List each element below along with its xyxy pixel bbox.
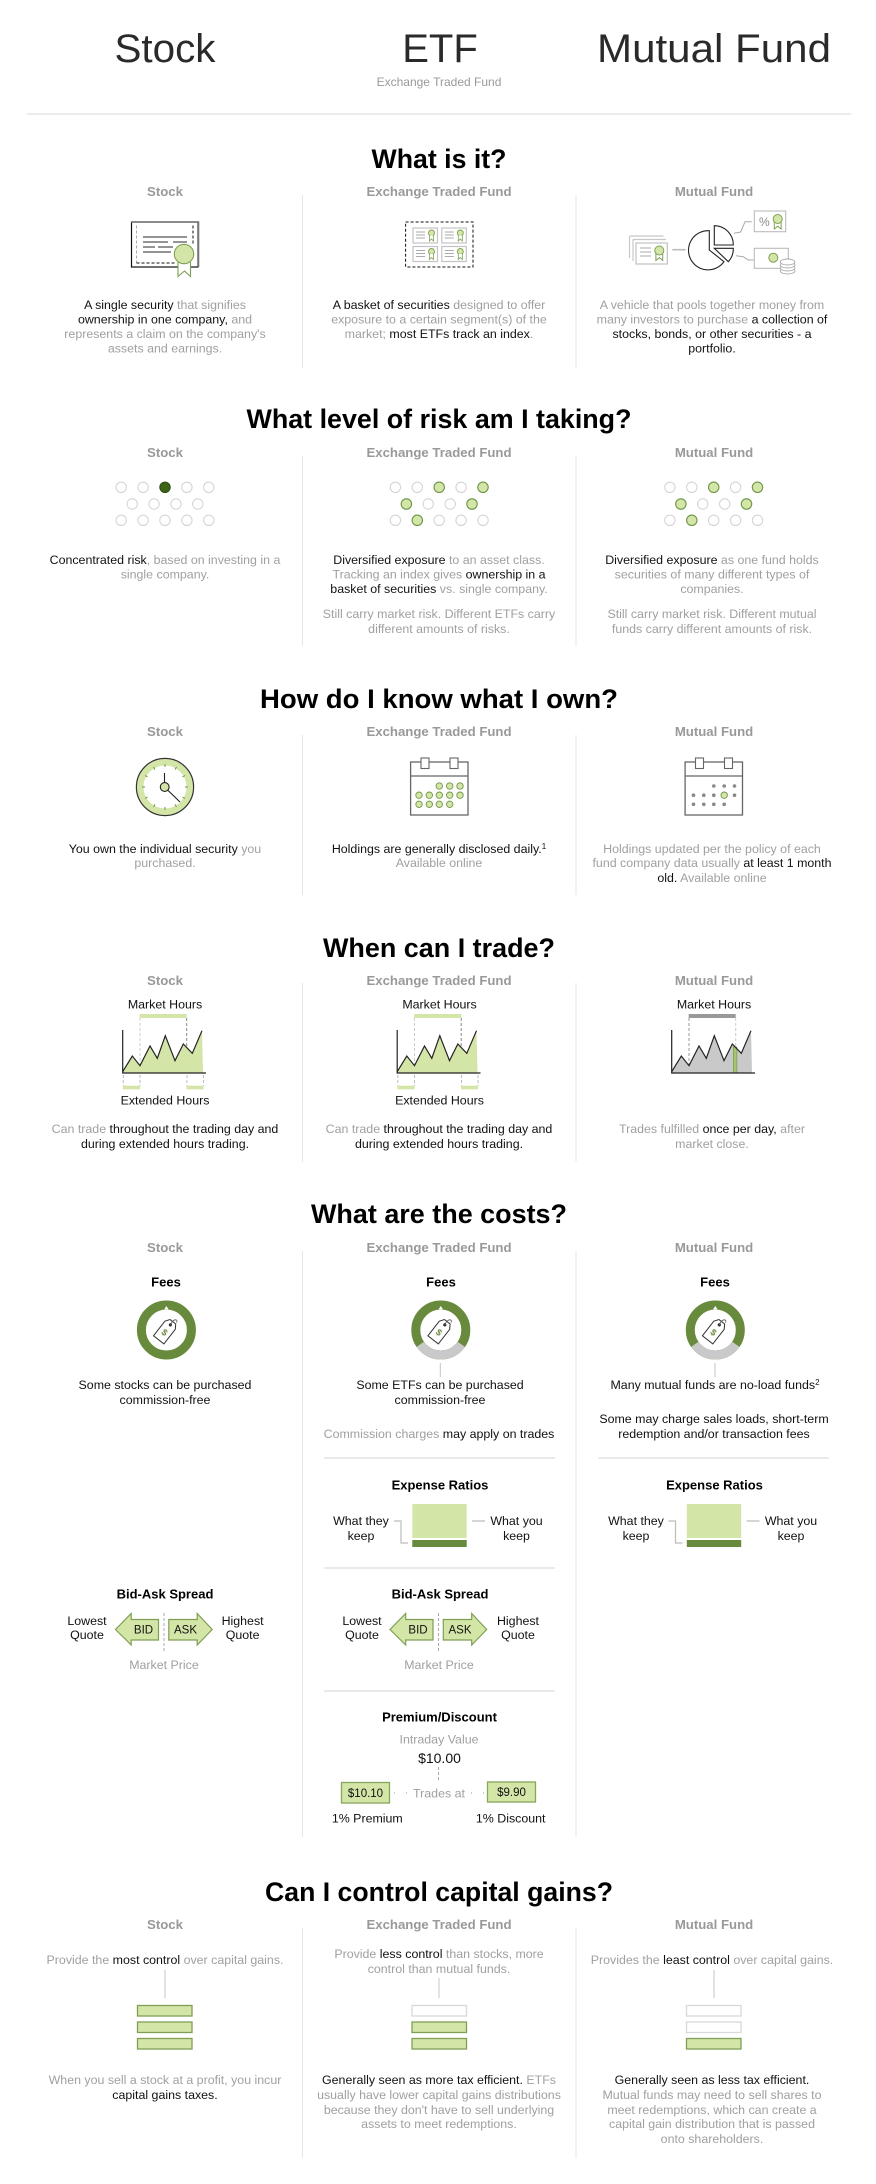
panel: mutual fund: Mutual Fund: [675, 184, 753, 199]
icon: bid ask arrows: ASK: [448, 1624, 472, 1636]
panel: ETF: [323, 445, 556, 636]
block: premium/discount: 1% Premium: [332, 1812, 403, 1826]
text: [331, 298, 547, 341]
block: bid-ask spread: Quote: [501, 1628, 535, 1642]
panel: ETF: [331, 184, 547, 341]
text: A basket of securities designed to offer: [333, 298, 545, 312]
text: because they don't have to sell underlying: [324, 2103, 554, 2117]
text: control than mutual funds.: [368, 1962, 510, 1976]
chart: market hours: [121, 998, 209, 1108]
callout: premium box: [342, 1782, 390, 1803]
icon: fund portfolio pie: [630, 211, 795, 274]
block: premium/discount: $10.00: [418, 1750, 461, 1766]
chart: market hours: Extended Hours: [121, 1094, 209, 1108]
block: fees: Fees: [700, 1274, 730, 1290]
panel: stock: Stock: [147, 445, 184, 460]
block: expense ratios: [333, 1478, 543, 1547]
title: Mutual Fund: Mutual Fund: [597, 27, 831, 71]
panel: mutual fund: [598, 1240, 829, 1547]
block: fees: Fees: [151, 1274, 181, 1290]
section: What level of risk am I taking?: [50, 404, 819, 646]
block: expense ratios: keep: [348, 1529, 375, 1543]
text: [332, 842, 547, 870]
text: represents a claim on the company's: [64, 327, 266, 341]
text: [602, 2073, 822, 2146]
section: What are the costs?: [67, 1199, 829, 1837]
panel: ETF: [326, 973, 552, 1151]
heading: What is it?: [372, 144, 506, 174]
section: What is it?: [64, 144, 828, 368]
panel: ETF: [332, 724, 547, 870]
icon: bid ask arrows: [116, 1613, 212, 1651]
panel: ETF: Exchange Traded Fund: [366, 184, 512, 199]
panel: stock: Stock: [147, 184, 184, 199]
block: fees: commission-free: [395, 1393, 486, 1407]
text: Generally seen as less tax efficient.: [615, 2073, 809, 2087]
block: expense ratios: Expense Ratios: [666, 1478, 763, 1492]
panel: ETF: Exchange Traded Fund: [366, 724, 512, 739]
panel: mutual fund: Mutual Fund: [675, 724, 753, 739]
panel: ETF: [317, 1917, 561, 2131]
icon: bid ask arrows: BID: [408, 1624, 428, 1636]
text: during extended hours trading.: [355, 1137, 523, 1151]
block: bid-ask spread: Bid-Ask Spread: [392, 1586, 488, 1602]
block: bid-ask spread: Quote: [345, 1628, 379, 1642]
panel: stock: [52, 973, 278, 1151]
panel: mutual fund: [592, 724, 832, 885]
text: Mutual funds may need to sell shares to: [602, 2088, 822, 2102]
panel: stock: [64, 184, 266, 356]
text: Generally seen as more tax efficient. ETFs: [322, 2073, 556, 2087]
block: bid-ask spread: [342, 1586, 540, 1672]
title: ETF: Exchange Traded Fund: [377, 75, 501, 89]
icon: fund portfolio pie: %: [759, 215, 770, 229]
text: Holdings are generally disclosed daily.: [332, 842, 542, 856]
heading: Can I control capital gains?: [265, 1877, 613, 1907]
callout: discount box: [488, 1782, 536, 1802]
block: expense ratios: What they: [333, 1514, 390, 1528]
text: [592, 842, 832, 885]
block: fees: Some stocks can be purchased: [79, 1378, 252, 1392]
text: usually have lower capital gains distributions: [317, 2088, 561, 2102]
text: capital gains taxes.: [112, 2088, 218, 2102]
block: expense ratios: [608, 1478, 817, 1547]
text: market close.: [675, 1137, 749, 1151]
chart: market hours: Market Hours: [128, 998, 202, 1012]
text: [619, 1122, 805, 1151]
block: expense ratios: keep: [623, 1529, 650, 1543]
text: single company.: [121, 568, 209, 582]
icon: bid ask arrows: [390, 1613, 487, 1651]
text: Holdings updated per the policy of each: [603, 842, 821, 856]
block: fees: [599, 1274, 829, 1441]
chart: diversified dots: [390, 482, 488, 526]
panel: ETF: Exchange Traded Fund: [366, 973, 512, 988]
text: When you sell a stock at a profit, you incur: [49, 2073, 281, 2087]
block: fees: Some may charge sales loads, short-term: [599, 1412, 829, 1426]
text: [605, 553, 819, 636]
block: fees: Commission charges may apply on trades: [324, 1427, 554, 1441]
block: expense ratios: What you: [765, 1514, 817, 1528]
chart: market hours: Extended Hours: [395, 1094, 484, 1108]
text: securities of many different types of: [615, 568, 810, 582]
block: bid-ask spread: [67, 1586, 264, 1672]
text: onto shareholders.: [661, 2132, 763, 2146]
icon: calendar daily: [411, 758, 468, 815]
text: [317, 2073, 561, 2131]
text: old. Available online: [657, 871, 767, 885]
panel: mutual fund: Mutual Fund: [675, 445, 753, 460]
text: assets to meet redemptions.: [361, 2117, 517, 2131]
text: capital gain distribution that is passed: [609, 2117, 815, 2131]
panel: mutual fund: [597, 184, 828, 356]
panel: mutual fund: Mutual Fund: [675, 973, 753, 988]
text: fund company data usually at least 1 month: [592, 856, 832, 870]
text: assets and earnings.: [108, 342, 222, 356]
text: meet redemptions, which can create a: [607, 2103, 817, 2117]
chart: control bars: [412, 2006, 466, 2049]
block: bid-ask spread: Lowest: [67, 1614, 107, 1628]
panel: mutual fund: [605, 445, 819, 636]
block: expense ratios: Expense Ratios: [392, 1478, 488, 1492]
block: bid-ask spread: Highest: [222, 1614, 264, 1628]
panel: ETF: Exchange Traded Fund: [366, 1917, 512, 1932]
text: funds carry different amounts of risk.: [612, 622, 812, 636]
section: When can I trade?: [52, 933, 805, 1162]
text: market; most ETFs track an index.: [345, 327, 533, 341]
icon: stock certificate: [131, 222, 198, 276]
icon: bid ask arrows: ASK: [174, 1624, 197, 1636]
section: How do I know what I own?: [69, 684, 832, 895]
text: A single security that signifies: [84, 298, 246, 312]
panel: stock: [69, 724, 261, 870]
panel: stock: [47, 1917, 283, 2102]
text: [597, 298, 828, 356]
block: expense ratios: keep: [778, 1529, 805, 1543]
callout: discount box: $9.90: [497, 1787, 526, 1799]
title: ETF: ETF: [402, 27, 478, 71]
chart: expense bar: [668, 1504, 760, 1547]
text: Diversified exposure as one fund holds: [605, 553, 819, 567]
panel: stock: [67, 1240, 264, 1672]
text: stocks, bonds, or other securities - a: [612, 327, 812, 341]
text: ownership in one company, and: [78, 312, 252, 326]
block: bid-ask spread: Highest: [497, 1614, 540, 1628]
text: Still carry market risk. Different mutual: [607, 607, 817, 621]
chart: diversified dots: [665, 482, 763, 526]
title: ETF: [377, 27, 501, 89]
text: purchased.: [134, 856, 196, 870]
page header: product titles: [114, 27, 831, 89]
text: Available online: [396, 856, 482, 870]
text: Provides the least control over capital gains.: [591, 1953, 833, 1967]
text: basket of securities vs. single company.: [330, 582, 548, 596]
chart: market hours: [395, 998, 484, 1108]
chart: once-per-day trade: Market Hours: [677, 998, 751, 1012]
text: [64, 298, 266, 356]
text: Can trade throughout the trading day and: [52, 1122, 278, 1136]
block: fees: Some ETFs can be purchased: [356, 1378, 524, 1392]
heading: What are the costs?: [311, 1199, 567, 1229]
text: [334, 1947, 544, 1976]
text: during extended hours trading.: [81, 1137, 249, 1151]
chart: market hours: Market Hours: [402, 998, 477, 1012]
text: portfolio.: [688, 342, 736, 356]
heading: What level of risk am I taking?: [246, 404, 632, 434]
text: Still carry market risk. Different ETFs carry: [323, 607, 556, 621]
text: Provide less control than stocks, more: [334, 1947, 544, 1961]
block: premium/discount: Premium/Discount: [382, 1710, 498, 1724]
text: A vehicle that pools together money from: [600, 298, 824, 312]
panel: stock: [50, 445, 280, 582]
block: bid-ask spread: Market Price: [404, 1658, 474, 1672]
section: Can I control capital gains?: [47, 1877, 833, 2158]
block: expense ratios: What they: [608, 1514, 665, 1528]
text: [52, 1122, 278, 1151]
icon: clock: [136, 758, 194, 816]
text: You own the individual security you: [69, 842, 261, 856]
panel: ETF: Exchange Traded Fund: [366, 1240, 512, 1255]
text: [69, 842, 261, 870]
panel: ETF: Exchange Traded Fund: [366, 445, 512, 460]
text: [49, 2073, 281, 2102]
panel: ETF: [324, 1240, 555, 1826]
icon: fee ring: [416, 1305, 466, 1355]
text: [326, 1122, 552, 1151]
text: Can trade throughout the trading day and: [326, 1122, 552, 1136]
block: bid-ask spread: Quote: [226, 1628, 260, 1642]
block: fees: Many mutual funds are no-load funds: [610, 1378, 815, 1392]
text: [323, 553, 556, 636]
chart: once-per-day trade: [672, 998, 755, 1073]
text: Provide the most control over capital gains.: [47, 1953, 283, 1967]
panel: stock: Stock: [147, 724, 184, 739]
text: 1: [542, 842, 547, 851]
text: [50, 553, 280, 582]
icon: bid ask arrows: BID: [134, 1624, 153, 1636]
panel: stock: Stock: [147, 1240, 184, 1255]
icon: calendar monthly: [685, 758, 742, 815]
text: different amounts of risks.: [368, 622, 510, 636]
panel: mutual fund: Mutual Fund: [675, 1240, 753, 1255]
block: fees: commission-free: [120, 1393, 211, 1407]
icon: fee ring: [141, 1305, 191, 1355]
block: expense ratios: keep: [503, 1529, 530, 1543]
panel: stock: Stock: [147, 1917, 184, 1932]
panel: mutual fund: [591, 1917, 833, 2146]
heading: How do I know what I own?: [260, 684, 618, 714]
text: companies.: [680, 582, 744, 596]
chart: control bars: [686, 2006, 741, 2049]
text: many investors to purchase a collection of: [597, 312, 828, 326]
block: premium/discount: 1% Discount: [476, 1812, 546, 1826]
block: bid-ask spread: Bid-Ask Spread: [117, 1586, 213, 1602]
text: Tracking an index gives ownership in a: [332, 568, 546, 582]
icon: basket of securities: [406, 222, 473, 267]
block: premium/discount: [332, 1710, 546, 1826]
text: Diversified exposure to an asset class.: [333, 553, 545, 567]
callout: premium box: $10.10: [348, 1788, 383, 1800]
text: Concentrated risk, based on investing in a: [50, 553, 280, 567]
title: Stock: Stock: [114, 27, 217, 71]
heading: When can I trade?: [323, 933, 555, 963]
chart: concentrated risk dots: [116, 482, 214, 526]
panel: mutual fund: [619, 973, 805, 1151]
block: premium/discount: Trades at: [413, 1786, 465, 1800]
block: premium/discount: Intraday Value: [400, 1732, 479, 1746]
text: exposure to a certain segment(s) of the: [331, 312, 547, 326]
block: expense ratios: What you: [490, 1514, 543, 1528]
panel: stock: Stock: [147, 973, 184, 988]
block: fees: [324, 1274, 554, 1441]
block: bid-ask spread: Quote: [70, 1628, 104, 1642]
chart: expense bar: [394, 1504, 485, 1547]
block: bid-ask spread: Lowest: [342, 1614, 382, 1628]
block: fees: redemption and/or transaction fees: [618, 1427, 810, 1441]
block: fees: [79, 1274, 252, 1407]
block: fees: Fees: [426, 1274, 456, 1290]
block: bid-ask spread: Market Price: [129, 1658, 199, 1672]
text: Trades fulfilled once per day, after: [619, 1122, 805, 1136]
icon: fee ring: [690, 1305, 740, 1355]
panel: mutual fund: Mutual Fund: [675, 1917, 753, 1932]
block: fees: 2: [815, 1378, 820, 1387]
chart: control bars: [138, 2006, 192, 2049]
